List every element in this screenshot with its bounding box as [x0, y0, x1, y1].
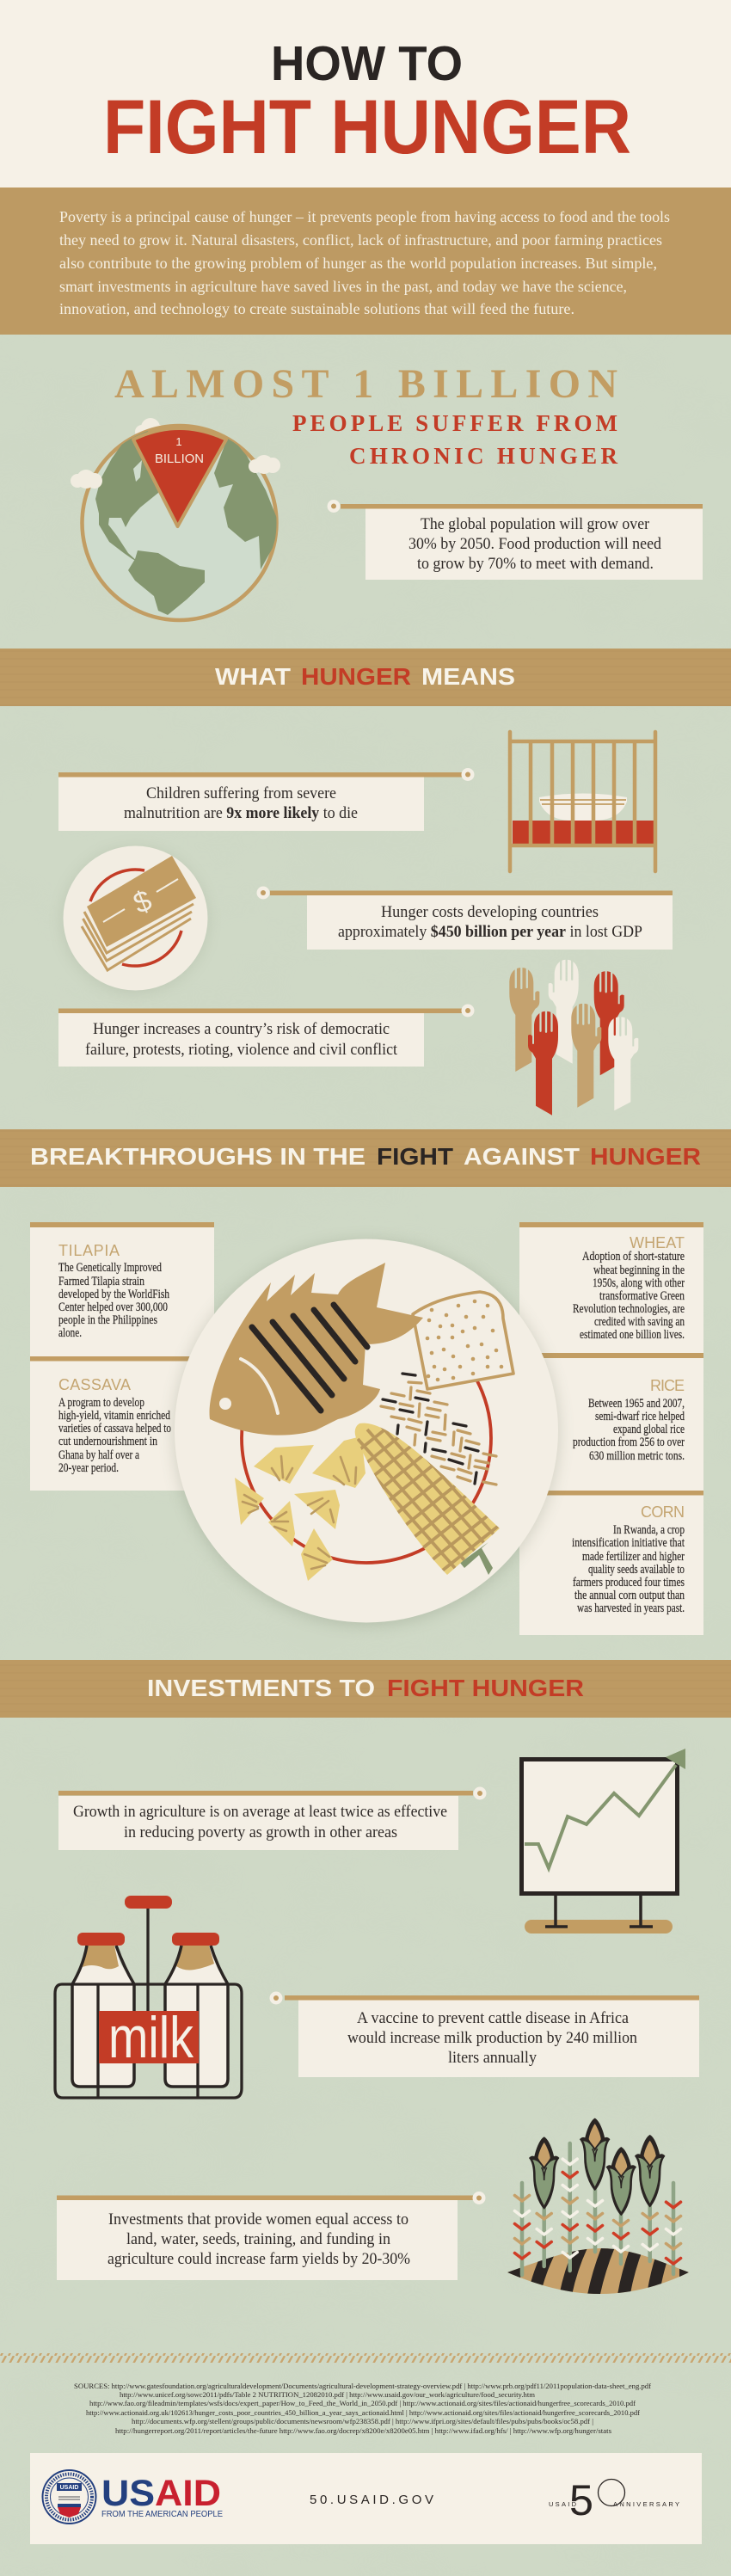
sources text: SOURCES: http://www.gatesfoundation.org/agriculturaldevelopment/Documents/agricultural-development-strategy-overview.pdf | http://www.prb.org/pdf11/2011population-data-sheet_eng.pdf	[74, 2382, 651, 2390]
panel: tilapia: TILAPIA	[58, 1242, 120, 1259]
callout: global population	[327, 500, 703, 580]
logo: usaid seal	[43, 2470, 96, 2524]
callout: global population: 30% by 2050. Food production will need	[408, 536, 662, 553]
callout: children malnutrition: malnutrition are 9x more likely to die	[124, 805, 358, 822]
callout: democratic failure: failure, protests, rioting, violence and civil conflict	[85, 1042, 398, 1059]
panel: tilapia: Farmed Tilapia strain	[58, 1275, 145, 1288]
logo: usaid wordmark: FROM THE AMERICAN PEOPLE	[101, 2510, 223, 2519]
leaves: tan chevrons	[514, 2195, 681, 2249]
panel: rice: semi-dwarf rice helped	[595, 1410, 685, 1423]
title line: how to: HOW TO	[271, 36, 463, 91]
logo: usaid 50th anniversary: USAID	[549, 2500, 577, 2508]
stalks	[522, 2143, 673, 2275]
panel: tilapia: The Genetically Improved	[58, 1261, 163, 1275]
panel: wheat: credited with saving an	[594, 1315, 685, 1329]
sources text	[74, 2382, 651, 2435]
panel: tilapia	[30, 1222, 214, 1356]
milk label: milk	[108, 2005, 194, 2070]
panel: cassava: A program to develop	[58, 1396, 144, 1410]
chart base	[525, 1920, 673, 1934]
callout: cattle vaccine: liters annually	[448, 2050, 538, 2067]
logo: usaid 50th anniversary: 5	[569, 2476, 593, 2524]
section band: investments	[0, 1660, 731, 1718]
callout: democratic failure: Hunger increases a country’s risk of democratic	[93, 1021, 390, 1038]
callout: agricultural growth: Growth in agriculture is on average at least twice as effective	[73, 1804, 447, 1821]
soil	[507, 2248, 689, 2294]
sources text: http://hungerreport.org/2011/report/articles/the-future http://www.fao.org/docrep/x8200e/x8200e05.htm | http://www.ifad.org/hfs/ | http://www.wfp.org/hunger/stats	[115, 2426, 612, 2435]
sources text: http://www.actionaid.org.uk/102613/hunger_costs_poor_countries_450_billion_a_year_says_actionaid.html | http://www.actionaid.org/sites/files/actionaid/hungerfree_scorecards_2010.pdf	[86, 2408, 640, 2417]
continents	[95, 430, 280, 615]
panel: corn: made fertilizer and higher	[582, 1550, 685, 1564]
intro band: innovation, and technology to create sustainable solutions that will feed the future.	[59, 300, 574, 317]
section band: what hunger means: HUNGER	[301, 663, 411, 690]
panel: rice	[519, 1353, 703, 1491]
callout: women equal access: land, water, seeds, training, and funding in	[126, 2231, 390, 2248]
callout: democratic failure	[58, 1005, 475, 1067]
callout: cattle vaccine	[270, 1992, 699, 2077]
panel: wheat: Adoption of short-stature	[582, 1250, 685, 1263]
icon: raised hands	[509, 960, 638, 1116]
subheading: chronic hunger	[292, 410, 617, 469]
panel: wheat: WHEAT	[630, 1234, 685, 1251]
section band: breakthroughs: FIGHT	[377, 1143, 453, 1170]
subheading: chronic hunger: PEOPLE SUFFER FROM	[292, 410, 617, 436]
icon: rice grains	[381, 1374, 496, 1485]
growth line	[525, 1749, 685, 1868]
panel: cassava	[30, 1356, 214, 1491]
section band: what hunger means	[0, 649, 731, 706]
intro band	[0, 188, 731, 335]
leaves: white chevrons	[514, 2159, 681, 2258]
panel: cassava: CASSAVA	[58, 1376, 131, 1393]
icon: growth chart	[521, 1749, 685, 1934]
bottle neck tan	[83, 1946, 214, 1970]
section band: what hunger means: WHAT	[215, 663, 291, 690]
callout: women equal access: agriculture could increase farm yields by 20-30%	[108, 2251, 410, 2268]
callout: children malnutrition: Children suffering from severe	[146, 785, 336, 802]
section band: investments: INVESTMENTS TO	[147, 1675, 375, 1701]
icon: cassava pieces	[235, 1436, 366, 1581]
heading: almost 1 billion: ALMOST 1 BILLION	[114, 361, 617, 407]
callout: women equal access: Investments that provide women equal access to	[108, 2211, 408, 2229]
panel: wheat	[519, 1222, 703, 1353]
panel: wheat: estimated one billion lives.	[580, 1328, 685, 1342]
panel: cassava: Ghana by half over a	[58, 1448, 139, 1462]
title line: fight hunger: FIGHT HUNGER	[103, 83, 631, 169]
panel: corn: In Rwanda, a crop	[613, 1523, 685, 1537]
section band: breakthroughs: BREAKTHROUGHS IN THE	[30, 1143, 366, 1170]
section band: breakthroughs: HUNGER	[590, 1143, 701, 1170]
sources text: http://www.fao.org/fileadmin/templates/wsfs/docs/expert_paper/How_to_Feed_the_World_in_2050.pdf | http://www.actionaid.org/sites/files/actionaid/hungerfree_scorecards_2010.pdf	[89, 2399, 636, 2407]
icon: money plate: $	[129, 884, 157, 920]
icon: bowl	[539, 793, 627, 821]
website url: 50.USAID.GOV	[310, 2493, 433, 2507]
section band: breakthroughs: AGAINST	[464, 1143, 580, 1170]
callout: global population: The global population will grow over	[421, 516, 649, 533]
logo: usaid 50th anniversary: ANNIVERSARY	[613, 2500, 679, 2508]
callout: women equal access	[57, 2192, 485, 2280]
bottle caps and handle	[77, 1896, 219, 1946]
panel: rice: expand global rice	[613, 1423, 685, 1436]
icon: crops in field	[507, 2118, 689, 2296]
decorative hatch divider	[0, 2353, 731, 2363]
panel: corn: CORN	[641, 1503, 685, 1521]
panel: cassava: 20-year period.	[58, 1461, 119, 1475]
intro band: they need to grow it. Natural disasters, conflict, lack of infrastructure, and poor farming practices	[59, 231, 662, 249]
subheading: chronic hunger: CHRONIC HUNGER	[349, 443, 617, 469]
panel: wheat: 1950s, along with other	[593, 1276, 685, 1290]
callout: cattle vaccine: A vaccine to prevent cattle disease in Africa	[357, 2010, 629, 2027]
panel: tilapia: people in the Philippines	[58, 1313, 157, 1327]
red wedge: 1 billion	[133, 428, 226, 526]
panel: tilapia: developed by the WorldFish	[58, 1288, 170, 1301]
callout: agricultural growth	[58, 1787, 487, 1850]
panel: wheat: transformative Green	[599, 1289, 685, 1303]
callout: cost of hunger: Hunger costs developing countries	[381, 904, 599, 921]
panel: tilapia: alone.	[58, 1326, 82, 1340]
callout: cost of hunger	[256, 886, 673, 950]
icon: corn cob	[354, 1423, 500, 1575]
callout: cost of hunger: approximately $450 billion per year in lost GDP	[338, 924, 642, 941]
icon: milk bottles in carrier	[55, 1896, 242, 2099]
panel: corn: farmers produced four times	[573, 1576, 685, 1589]
intro band: also contribute to the growing problem of hunger as the world population increases. But simple,	[59, 255, 657, 272]
panel: rice: RICE	[650, 1377, 685, 1394]
title area	[0, 0, 731, 188]
icon: crib with empty bowl	[510, 732, 655, 871]
panel: cassava: high-yield, vitamin enriched	[58, 1409, 171, 1423]
panel: rice: production from 256 to over	[573, 1436, 685, 1449]
callout: cattle vaccine: would increase milk production by 240 million	[347, 2030, 637, 2047]
callout: global population: to grow by 70% to meet with demand.	[417, 556, 654, 573]
icon: food plate	[174, 1239, 559, 1626]
corn plants	[530, 2118, 665, 2216]
sources text: http://www.unicef.org/sowc2011/pdfs/Table 2 NUTRITION_12082010.pdf | http://www.usaid.gov/our_work/agriculture/food_security.htm	[120, 2390, 535, 2399]
icon: money plate	[63, 846, 208, 993]
intro band: Poverty is a principal cause of hunger – it prevents people from having access to food and the tools	[59, 208, 670, 225]
logo: usaid wordmark: USAID	[101, 2473, 221, 2514]
icon: globe	[71, 418, 280, 620]
panel: cassava: varieties of cassava helped to	[58, 1422, 171, 1436]
panel: rice: Between 1965 and 2007,	[588, 1397, 685, 1411]
logo: usaid seal: USAID	[60, 2485, 78, 2491]
panel: rice: 630 million metric tons.	[589, 1449, 685, 1463]
callout: children malnutrition	[58, 768, 475, 831]
bottle fills	[71, 1946, 227, 2087]
panel: corn	[519, 1491, 703, 1635]
carrier and bottle outlines	[55, 1909, 242, 2099]
red wedge: 1 billion: BILLION	[155, 452, 204, 466]
panel: corn: was harvested in years past.	[577, 1602, 685, 1615]
red wedge: 1 billion: 1	[175, 435, 182, 448]
callout: agricultural growth: in reducing poverty as growth in other areas	[124, 1824, 397, 1841]
sources text: http://documents.wfp.org/stellent/groups/public/documents/newsroom/wfp238358.pdf | http://www.ifpri.org/sites/default/files/pubs/pubs/books/oc58.pdf |	[132, 2417, 593, 2425]
leaves: red chevrons	[514, 2173, 681, 2264]
icon: fish	[210, 1263, 423, 1436]
panel: wheat: wheat beginning in the	[593, 1263, 685, 1277]
panel: wheat: Revolution technologies, are	[573, 1302, 685, 1316]
panel: corn: quality seeds available to	[588, 1563, 685, 1577]
footer panel	[30, 2453, 702, 2544]
panel: corn: the annual corn output than	[574, 1589, 685, 1602]
icon: right cloud	[249, 455, 280, 474]
panel: tilapia: Center helped over 300,000	[58, 1300, 168, 1314]
section band: investments: FIGHT HUNGER	[387, 1675, 584, 1701]
logo: usaid 50th anniversary	[549, 2476, 679, 2524]
intro band: smart investments in agriculture have saved lives in the past, and today we have the science,	[59, 278, 627, 295]
icon: top cloud	[135, 418, 166, 439]
panel: cassava: cut undernourishment in	[58, 1435, 158, 1448]
section band: breakthroughs	[0, 1129, 731, 1187]
icon: left cloud	[71, 470, 102, 489]
icon: bread slice	[413, 1292, 513, 1389]
section band: what hunger means: MEANS	[421, 663, 515, 690]
heading: almost 1 billion	[114, 361, 617, 469]
panel: corn: intensification initiative that	[572, 1536, 685, 1550]
chart legs	[545, 1894, 653, 1927]
